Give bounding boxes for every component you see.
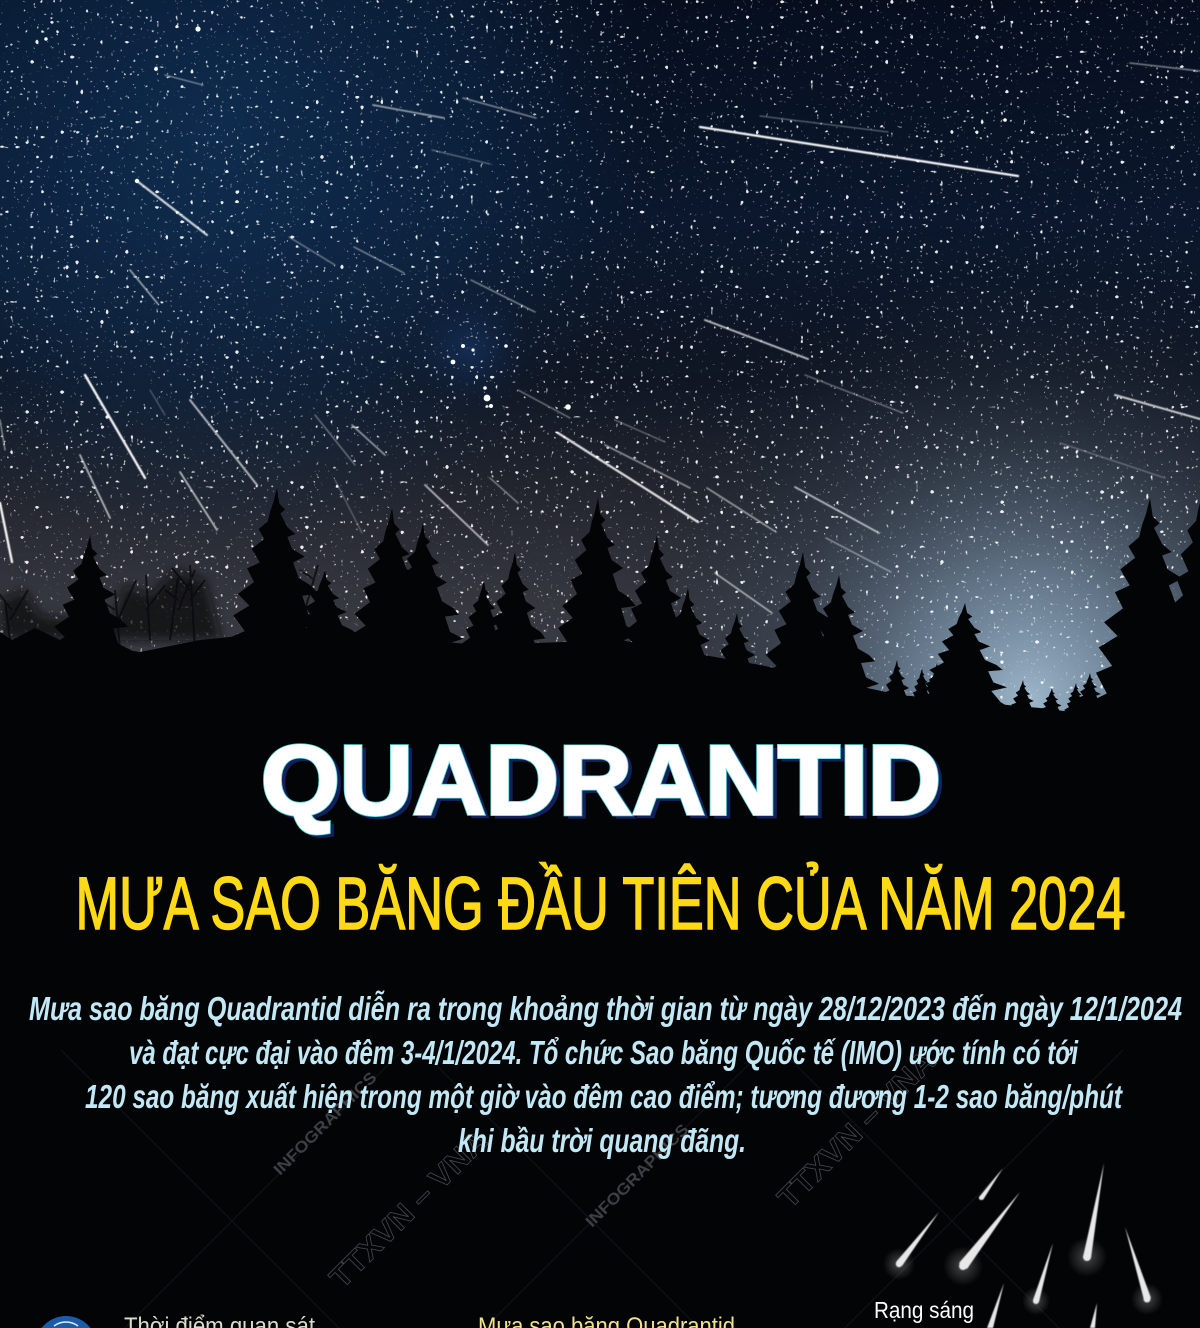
watermark lattice (61, 1045, 1123, 1328)
decorative falling meteors (883, 1163, 1163, 1328)
label: dawn: Rạng sáng (874, 1297, 974, 1323)
watermark text (271, 1045, 942, 1295)
watermark text: INFOGRAPHICS (583, 1121, 693, 1231)
icon: clock badge (35, 1316, 97, 1328)
star field (0, 0, 1200, 700)
watermark text: TTXVN – VNA (772, 1045, 942, 1215)
title: QUADRANTID (265, 728, 945, 838)
tree silhouettes (0, 480, 1200, 1328)
title outline: QUADRANTID (261, 725, 941, 835)
watermark text: INFOGRAPHICS (271, 1069, 381, 1179)
bare branches (0, 565, 318, 650)
intro paragraph (29, 990, 1182, 1159)
title front: QUADRANTID (261, 725, 941, 835)
intro paragraph: khi bầu trời quang đãng. (458, 1122, 746, 1159)
meteors (0, 63, 1200, 613)
watermark text: TTXVN – VNA (324, 1125, 494, 1295)
